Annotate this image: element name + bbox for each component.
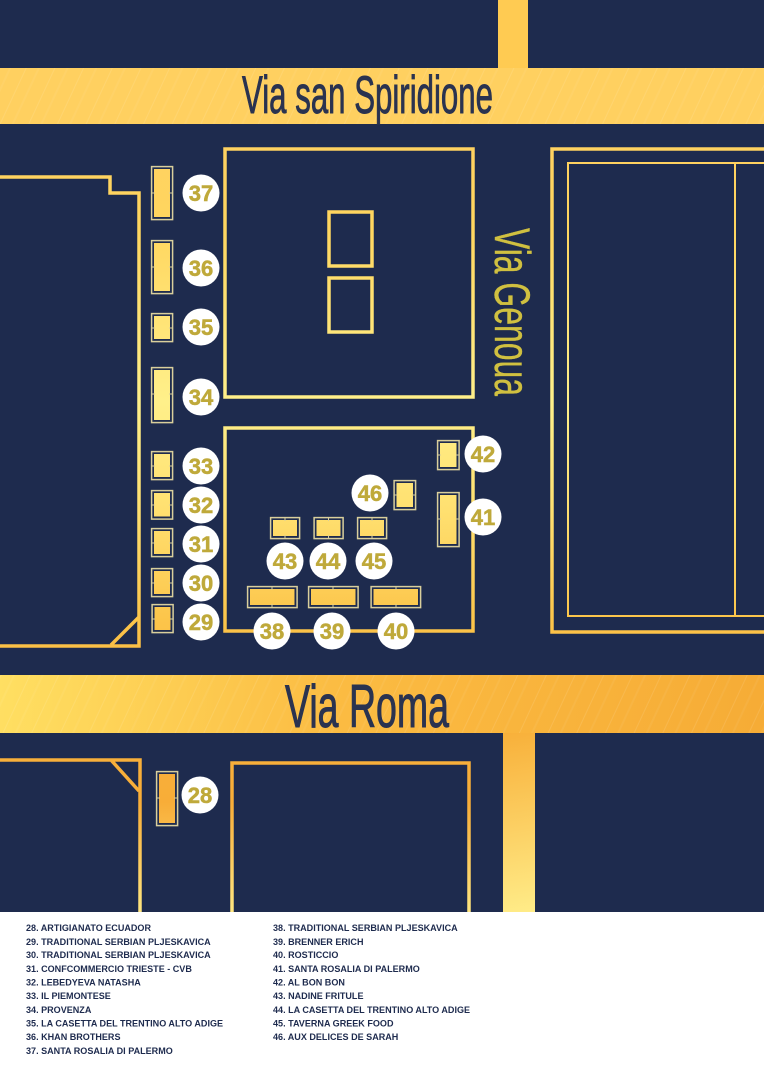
legend: stalls 38 to 46: 38. TRADITIONAL SERBIAN PLJESKAVICA [273, 923, 458, 933]
heading: Via san Spiridione: Via san Spiridione [242, 66, 493, 125]
stall 29: 29 [189, 610, 213, 635]
legend: stalls 28 to 37 [26, 923, 223, 1056]
stall 41: 41 [471, 505, 495, 530]
building: east block [552, 149, 764, 632]
stall 31 [152, 526, 220, 562]
stall 37: 37 [189, 181, 213, 206]
inner square: lower [329, 278, 372, 332]
stall 38: 38 [260, 619, 284, 644]
building: south-central block [232, 763, 469, 912]
legend: stalls 38 to 46: 40. ROSTICCIO [273, 950, 338, 960]
legend: stalls 38 to 46: 45. TAVERNA GREEK FOOD [273, 1018, 394, 1028]
stall 44: 44 [316, 549, 341, 574]
stall 35 [152, 308, 220, 346]
stall 45: 45 [362, 549, 386, 574]
stall 34: 34 [189, 385, 214, 410]
legend: stalls 38 to 46: 43. NADINE FRITULE [273, 991, 363, 1001]
stall 40 [371, 587, 421, 650]
stall 35: 35 [189, 315, 213, 340]
stall 34 [152, 368, 220, 423]
stall 37 [152, 167, 220, 220]
legend: stalls 28 to 37: 34. PROVENZA [26, 1005, 92, 1015]
stall 42 [438, 436, 502, 472]
building: central south block [225, 428, 473, 631]
inner square: upper [329, 212, 372, 266]
stall 39 [309, 587, 358, 650]
east block inner outline [568, 163, 764, 616]
stall 44 [310, 518, 346, 580]
stall 45 [356, 518, 392, 580]
legend: stalls 38 to 46 [273, 923, 470, 1042]
stall 41 [438, 493, 502, 547]
heading: Via Genoua: Via Genoua [484, 228, 540, 396]
stall 36 [152, 241, 220, 294]
legend: stalls 38 to 46: 39. BRENNER ERICH [273, 937, 364, 947]
legend: stalls 38 to 46: 42. AL BON BON [273, 978, 345, 988]
building: central north block [225, 149, 473, 397]
stall 38 [248, 587, 297, 650]
stall 28: 28 [188, 783, 212, 808]
heading: Via Roma: Via Roma [285, 673, 449, 740]
legend: stalls 28 to 37: 36. KHAN BROTHERS [26, 1032, 121, 1042]
stall 33: 33 [189, 454, 213, 479]
stall 43 [266, 518, 304, 580]
road: south side street [503, 733, 535, 912]
legend: stalls 28 to 37: 30. TRADITIONAL SERBIAN PLJESKAVICA [26, 950, 211, 960]
stall 32 [152, 486, 220, 524]
stall 30 [152, 564, 220, 602]
legend: stalls 28 to 37: 37. SANTA ROSALIA DI PALERMO [26, 1046, 173, 1056]
stall 36: 36 [189, 256, 213, 281]
stall 30: 30 [189, 571, 213, 596]
legend: stalls 38 to 46: 44. LA CASETTA DEL TRENTINO ALTO ADIGE [273, 1005, 470, 1015]
stall 39: 39 [320, 619, 344, 644]
legend: stalls 38 to 46: 41. SANTA ROSALIA DI PALERMO [273, 964, 420, 974]
legend: stalls 28 to 37: 32. LEBEDYEVA NATASHA [26, 978, 141, 988]
building: west block [0, 177, 139, 646]
stall 33 [152, 448, 220, 484]
stall 46: 46 [358, 481, 382, 506]
legend: stalls 28 to 37: 33. IL PIEMONTESE [26, 991, 111, 1001]
stall 32: 32 [189, 493, 213, 518]
legend: stalls 38 to 46: 46. AUX DELICES DE SARAH [273, 1032, 398, 1042]
road: north side street [498, 0, 528, 68]
stall 42: 42 [471, 442, 495, 467]
stall 46 [352, 474, 416, 512]
stall 29 [152, 604, 220, 640]
road: Via Roma [0, 673, 764, 740]
stall 31: 31 [189, 532, 213, 557]
legend: stalls 28 to 37: 35. LA CASETTA DEL TRENTINO ALTO ADIGE [26, 1018, 223, 1028]
stall 28 [157, 772, 218, 826]
building: south-west block [0, 760, 140, 912]
legend: stalls 28 to 37: 31. CONFCOMMERCIO TRIESTE - CVB [26, 964, 192, 974]
road: Via san Spiridione [0, 66, 764, 125]
stall 43: 43 [273, 549, 297, 574]
legend: stalls 28 to 37: 29. TRADITIONAL SERBIAN PLJESKAVICA [26, 937, 211, 947]
legend: stalls 28 to 37: 28. ARTIGIANATO ECUADOR [26, 923, 151, 933]
stall 40: 40 [384, 619, 408, 644]
